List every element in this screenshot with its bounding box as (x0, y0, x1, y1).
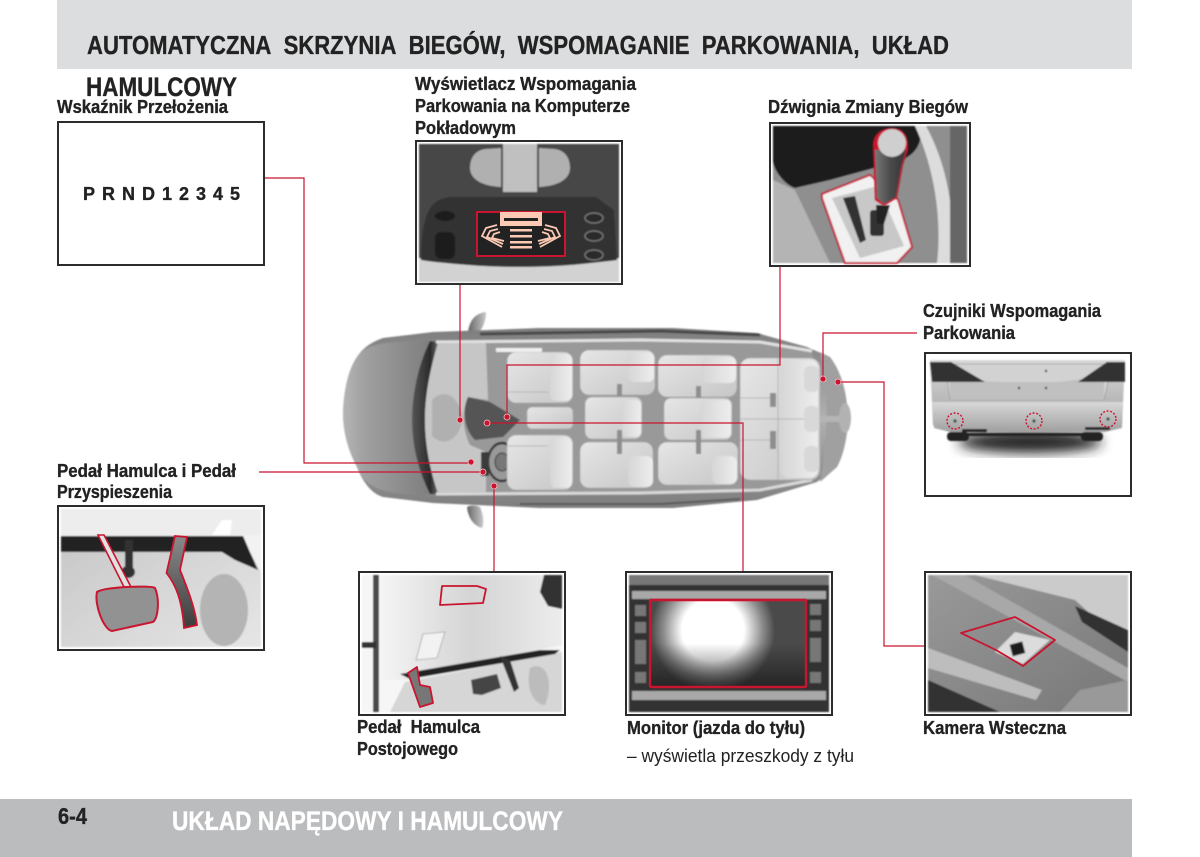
release handle outline (440, 586, 486, 605)
rear hatch (820, 352, 848, 482)
label: Wyświetlacz Wspomagania (415, 74, 637, 94)
label: Postojowego (357, 739, 458, 759)
seat details (507, 358, 820, 480)
gear lever shaft (873, 128, 908, 206)
title: AUTOMATYCZNA SKRZYNIA BIEGÓW, WSPOMAGANIE PARKOWANIA, UKŁAD (87, 30, 949, 60)
label: Wskaźnik Przełożenia (57, 97, 229, 117)
gear letters: PRND12345 (83, 184, 240, 204)
label: Pedał Hamulca (357, 717, 481, 737)
label: Przyspieszenia (57, 482, 173, 502)
icon: mirrors (467, 312, 486, 528)
label: Kamera Wsteczna (923, 718, 1067, 738)
red display frame (477, 212, 565, 256)
shifter plate (822, 175, 912, 263)
footer band (0, 799, 1132, 857)
label: Czujniki Wspomagania (923, 301, 1102, 321)
label: Pedał Hamulca i Pedał (57, 461, 236, 481)
center console (465, 397, 520, 440)
label: Monitor (jazda do tyłu) (627, 718, 805, 738)
panel: monitor (626, 572, 854, 766)
label (357, 717, 481, 759)
label: Parkowania na Komputerze (415, 96, 630, 116)
callout dots (457, 376, 841, 489)
parking pedal outline (408, 667, 433, 707)
cabin floor (425, 338, 819, 494)
label (57, 461, 236, 502)
description: – wyświetla przeszkody z tyłu (627, 746, 854, 766)
panel: parking assist display (415, 74, 637, 284)
car body (343, 328, 848, 508)
panel: gear indicator (57, 97, 264, 265)
seat backs (550, 352, 818, 488)
side sills (436, 340, 812, 351)
panel: parking sensors (923, 301, 1131, 496)
dashboard (425, 343, 488, 493)
brake pedal (96, 535, 158, 631)
label: Dźwignia Zmiany Biegów (768, 97, 969, 117)
sensor rings (947, 411, 1116, 429)
title: HAMULCOWY (86, 72, 237, 102)
label (923, 301, 1102, 343)
panel: rear camera (923, 572, 1131, 738)
header band (57, 0, 1132, 69)
steering wheel (488, 443, 516, 481)
footer section title: UKŁAD NAPĘDOWY I HAMULCOWY (172, 806, 563, 836)
label: Parkowania (923, 323, 1016, 343)
label: Pokładowym (415, 118, 516, 138)
panel: brake and accelerator pedals (57, 461, 264, 650)
car top view (343, 312, 851, 528)
windshield (412, 341, 438, 494)
panel: parking brake pedal (357, 572, 565, 759)
camera outline (961, 617, 1055, 666)
hood (343, 341, 430, 494)
label (415, 74, 637, 138)
panel: gear lever (768, 97, 970, 266)
tailgate spoiler (820, 416, 840, 422)
title (86, 30, 949, 102)
connector lines (259, 178, 924, 646)
page number: 6-4 (58, 803, 87, 829)
seats (507, 350, 820, 490)
accelerator pedal (166, 536, 197, 628)
monitor screen (650, 600, 806, 687)
